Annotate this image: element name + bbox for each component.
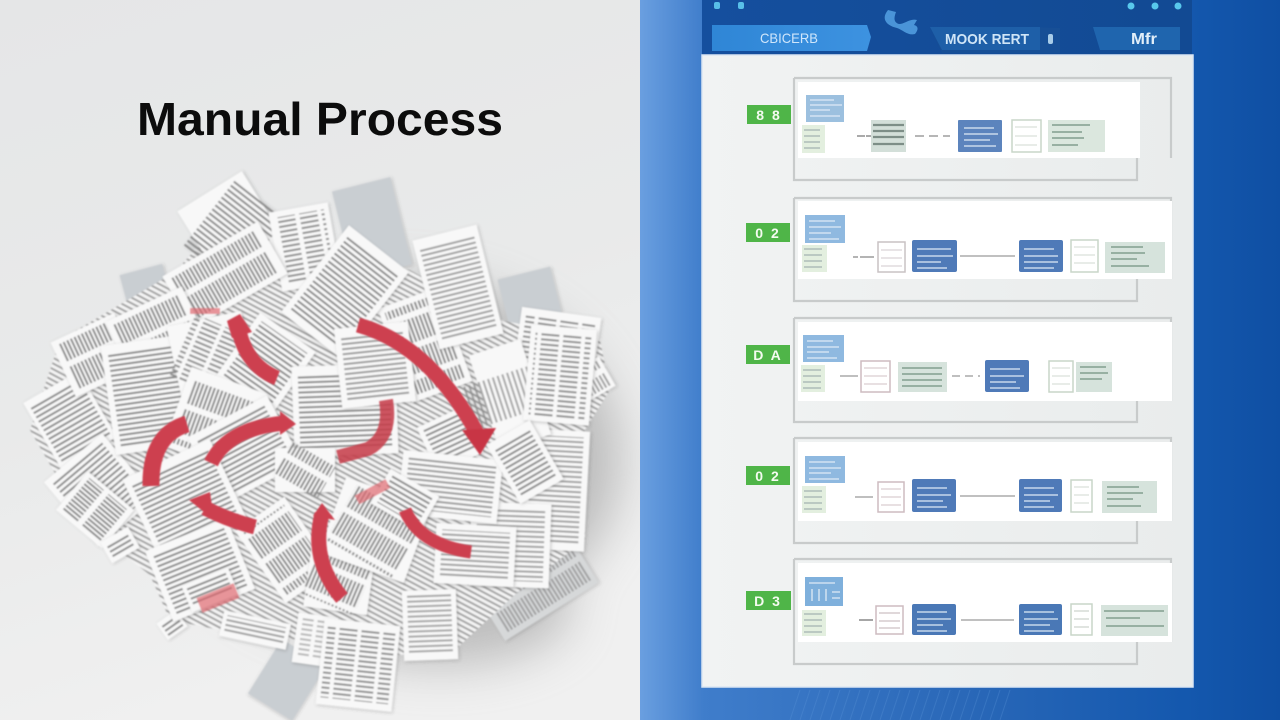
connector — [960, 495, 1015, 497]
tab: first step: CBICERB — [760, 30, 818, 46]
blue step box — [912, 240, 957, 272]
tab: second step — [930, 27, 1060, 53]
badge: 8 8 — [756, 107, 782, 123]
blue step box — [1019, 240, 1063, 272]
icon: blue workflow logo — [885, 10, 918, 34]
decorative hatching — [790, 690, 1010, 720]
arrow: vertical curve — [313, 503, 342, 598]
badge: 0 2 — [755, 468, 781, 484]
badge: D A — [753, 347, 783, 363]
small connector — [855, 496, 873, 498]
tab: third step — [1093, 27, 1180, 50]
blue step box — [1019, 604, 1062, 635]
connector — [960, 255, 1015, 257]
blue step box — [985, 360, 1029, 392]
highlighted red text fragments — [190, 308, 390, 613]
outlined step box — [1071, 480, 1092, 512]
badge — [746, 223, 790, 242]
checklist — [802, 486, 826, 513]
badge: 0 2 — [755, 225, 781, 241]
checklist — [802, 610, 826, 636]
green output box — [1105, 242, 1165, 273]
source document — [805, 215, 845, 243]
green step box — [898, 362, 947, 392]
panel: structured digital workflow — [640, 0, 1280, 720]
arrow: faded right hook — [338, 400, 387, 457]
window dots right — [1128, 2, 1182, 10]
workflow row 5 — [746, 559, 1172, 664]
arrows: tangled red process arrows — [151, 314, 496, 598]
badge — [747, 105, 791, 124]
small connector — [853, 256, 874, 258]
small connector — [859, 619, 873, 621]
workflow row 4 — [746, 438, 1172, 543]
outlined pink step box — [861, 361, 890, 392]
small connector — [840, 375, 858, 377]
badge — [746, 466, 790, 485]
outlined step box — [1071, 604, 1092, 635]
outlined step box — [876, 606, 903, 634]
badge — [746, 345, 790, 364]
blue step box — [912, 604, 956, 635]
connector — [952, 375, 980, 377]
badge — [746, 591, 791, 610]
arrow: central arc — [211, 411, 296, 463]
blue step box — [912, 479, 956, 512]
green output box — [1076, 362, 1112, 392]
checklist — [802, 245, 827, 272]
checklist — [801, 365, 825, 392]
tab: second step: MOOK RERT — [945, 31, 1029, 48]
source document — [806, 95, 844, 122]
paper pile shadow — [170, 280, 620, 665]
workflow row 2 — [746, 198, 1172, 301]
source document — [805, 577, 843, 606]
tab: third step: Mfr — [1131, 31, 1157, 48]
outlined step box — [878, 482, 904, 512]
checklist — [802, 125, 825, 153]
green output box — [1048, 120, 1105, 152]
heading: Manual Process: Manual Process — [137, 93, 503, 145]
blue step box — [1019, 479, 1062, 512]
arrow: long sweep to the lower right — [358, 325, 496, 455]
small connector — [857, 135, 871, 137]
blue step box — [958, 120, 1002, 152]
tab: first step — [712, 25, 871, 51]
green output box — [1102, 481, 1157, 513]
arrow: upper curved — [227, 314, 277, 378]
illustration: pile of scattered documents — [23, 165, 616, 720]
app header bar — [702, 0, 1192, 55]
outlined step box — [1049, 361, 1073, 392]
source document — [805, 456, 845, 483]
arrow: lower right curve — [405, 510, 471, 552]
outlined step box — [878, 242, 905, 272]
outlined step box — [1012, 120, 1041, 152]
workflow row 1 — [747, 78, 1171, 180]
window dots left — [714, 2, 744, 9]
connector — [961, 619, 1014, 621]
connector — [915, 135, 950, 137]
grey-green step box — [871, 120, 906, 152]
outlined step box — [1071, 240, 1098, 272]
main content panel — [702, 55, 1193, 687]
workflow row 3 — [746, 318, 1172, 422]
arrow: left arc — [151, 424, 187, 486]
badge: D 3 — [754, 593, 782, 609]
green output box — [1101, 605, 1168, 636]
arrow: pointing back left — [189, 492, 255, 527]
panel: manual process background — [0, 0, 640, 720]
source document — [803, 335, 844, 362]
